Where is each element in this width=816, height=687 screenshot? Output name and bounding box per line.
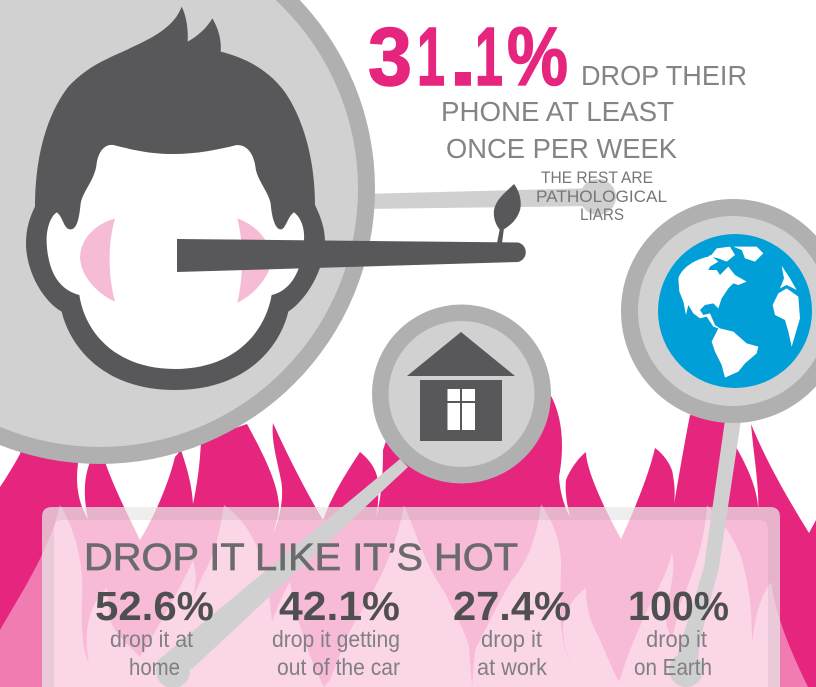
connector: earth stat line [669,420,741,687]
headline number [368,10,568,103]
stat: earth [628,583,729,680]
left cheek [80,218,115,302]
stat: car: drop it getting [272,626,400,652]
stat: earth: drop it [646,626,708,652]
headline stat [368,10,747,164]
stat: car: out of the car [277,654,400,680]
headline number: . [449,10,477,103]
headline number: 1 [475,10,503,103]
headline line 1: DROP THEIR [581,60,747,91]
connector: phone stat line [360,179,616,215]
house circle [372,304,551,484]
long nose [177,239,526,272]
flames: pale inner layer [0,504,808,687]
flames: solid pink [0,394,816,687]
head and hair [26,7,325,390]
stat: earth: 100% [628,583,729,629]
stat: car [272,583,400,680]
headline line 2: PHONE AT LEAST [441,96,674,127]
headline line 3: ONCE PER WEEK [446,133,677,164]
panel: drop it like it's hot [42,507,780,687]
stat: home: drop it at [110,626,194,652]
icon: continents [678,247,800,378]
connector: home stat line [156,459,408,687]
icon: leaf on nose [494,184,521,243]
stat: home: 52.6% [95,583,214,629]
stat: home: home [129,654,180,680]
globe circle [621,199,816,423]
note: pathological liars [536,169,667,224]
icon: house [407,332,515,441]
stat: work: 27.4% [453,583,571,629]
headline number: % [507,10,568,103]
stat: earth: on Earth [634,654,712,680]
stat: work [453,583,571,680]
note: pathological liars: THE REST ARE [541,169,653,187]
note: pathological liars: PATHOLOGICAL [536,188,667,206]
stat: home [95,583,214,680]
panel heading: DROP IT LIKE IT’S HOT [84,537,518,579]
stat: work: at work [477,654,547,680]
stat: car: 42.1% [279,583,400,629]
headline number: 3 [368,10,412,103]
stat: work: drop it [481,626,543,652]
face [47,145,304,369]
right cheek [237,218,272,303]
note: pathological liars: LIARS [580,206,624,224]
headline number: 1 [417,10,445,103]
big circle with face [0,0,375,464]
